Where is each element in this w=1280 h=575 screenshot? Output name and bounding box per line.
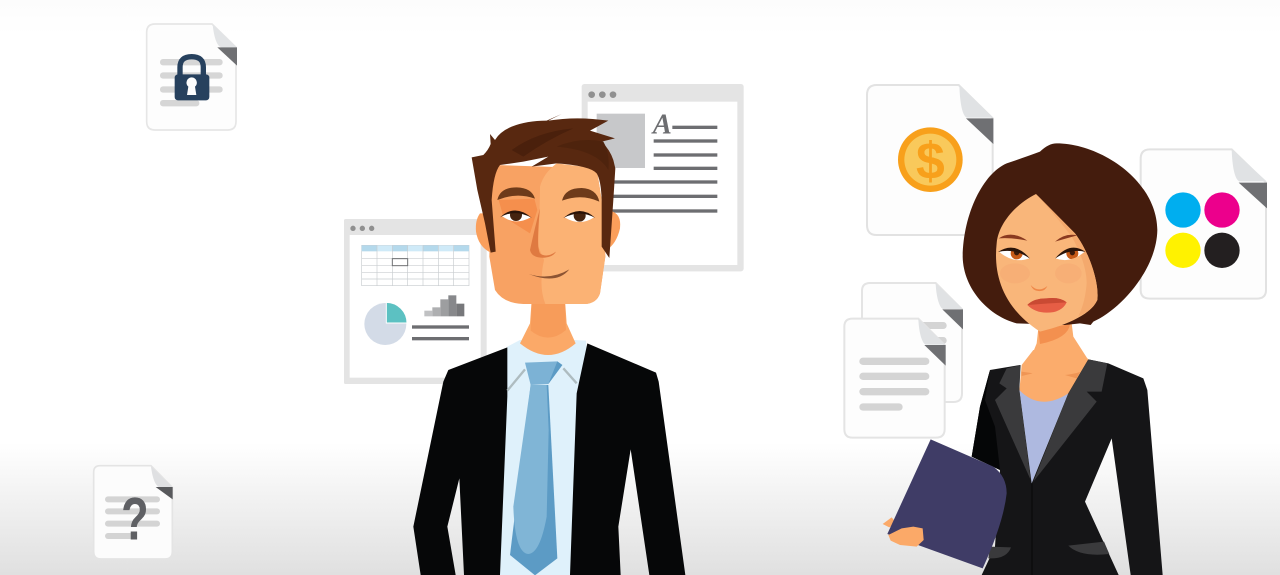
woman body: blazer and blouse (883, 350, 1163, 575)
eyebrows (497, 187, 599, 202)
hair (472, 114, 615, 258)
bar chart (424, 295, 464, 316)
document icon: question mark: ? (121, 486, 149, 553)
neck (1030, 323, 1088, 360)
character: man (413, 114, 685, 575)
cheek blush (1000, 263, 1082, 283)
document icon: dollar coin (867, 85, 993, 235)
nose (1031, 285, 1047, 291)
folder (887, 439, 1007, 568)
face (996, 194, 1098, 332)
eyes (998, 247, 1086, 260)
hand fingers (888, 527, 924, 547)
document icon: CMYK colours (1141, 149, 1267, 299)
man body: suit, shirt and tie (413, 340, 685, 575)
eyes (500, 210, 596, 222)
hair (963, 143, 1157, 325)
ears (476, 211, 620, 253)
pie chart (364, 302, 407, 345)
hand thumb (883, 517, 897, 527)
document icon: question mark (94, 466, 173, 559)
woman head (963, 143, 1157, 360)
smile (529, 269, 569, 279)
front page (844, 319, 946, 438)
lips (1027, 298, 1067, 313)
man head (472, 114, 620, 355)
window: article layout: A (651, 109, 672, 141)
back page (862, 283, 963, 402)
neck (520, 300, 576, 355)
nose (530, 208, 556, 258)
spreadsheet table (362, 245, 469, 286)
eyebrows (999, 235, 1077, 242)
document icon: stacked pages (844, 283, 963, 438)
window: data sheet with charts (344, 219, 487, 384)
document icon: dollar coin: $ (916, 131, 945, 189)
tie (510, 361, 562, 575)
character: woman (883, 143, 1163, 575)
document icon: padlock (147, 24, 237, 130)
window: article layout (582, 84, 744, 271)
face (489, 165, 605, 304)
